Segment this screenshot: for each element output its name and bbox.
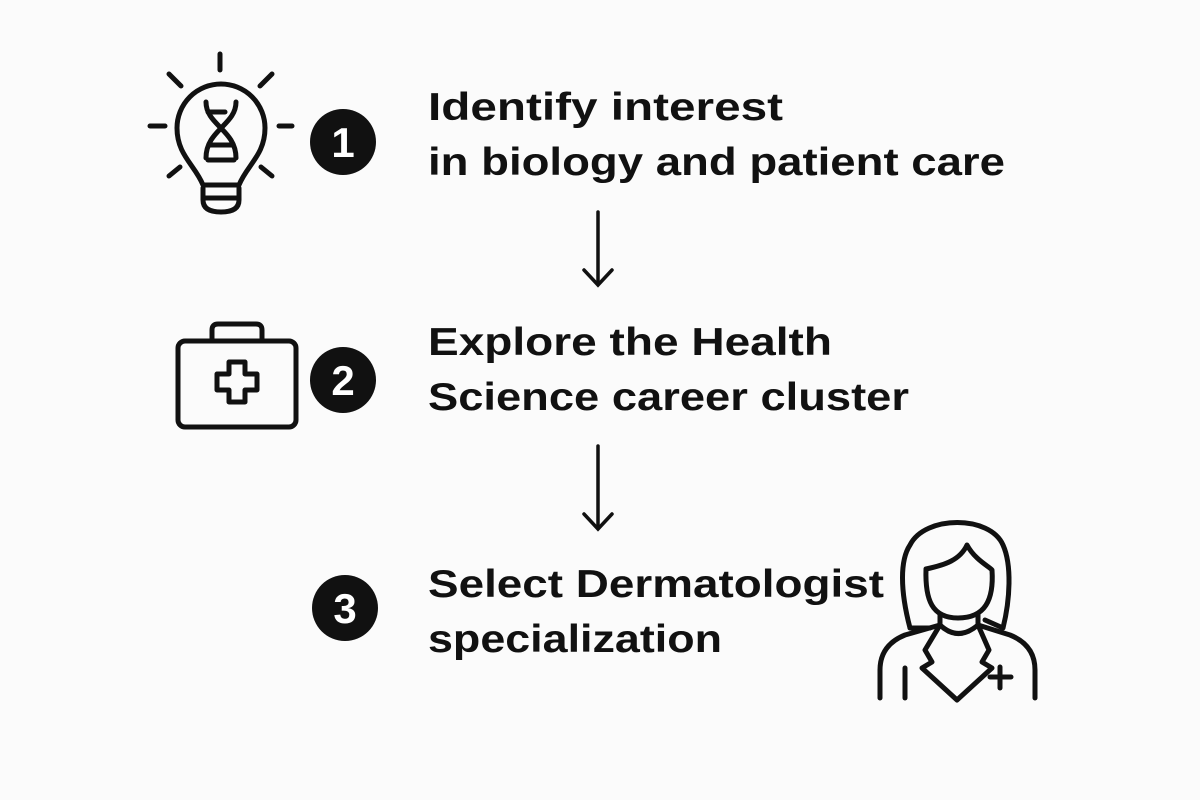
step 2 text (428, 321, 909, 419)
badge 2: 2 (331, 357, 355, 404)
icon: female doctor (880, 522, 1035, 700)
icon: lightbulb with DNA (150, 54, 292, 212)
step 2 text: Explore the Health (428, 321, 832, 364)
badge 2 (310, 347, 376, 413)
icon: medical case (178, 324, 296, 427)
step 1 text: Identify interest (428, 86, 783, 129)
badge 3: 3 (333, 585, 357, 632)
step 2 text: Science career cluster (428, 376, 909, 419)
badge 1: 1 (331, 119, 355, 166)
arrow 2 (584, 446, 612, 529)
badge 3 (312, 575, 378, 641)
step 1 text: in biology and patient care (428, 141, 1005, 184)
step 3 text: Select Dermatologist (428, 563, 884, 606)
step 3 text: specialization (428, 618, 722, 661)
badge 1 (310, 109, 376, 175)
step 3 text (428, 563, 884, 661)
step 1 text (428, 86, 1005, 184)
arrow 1 (584, 212, 612, 285)
